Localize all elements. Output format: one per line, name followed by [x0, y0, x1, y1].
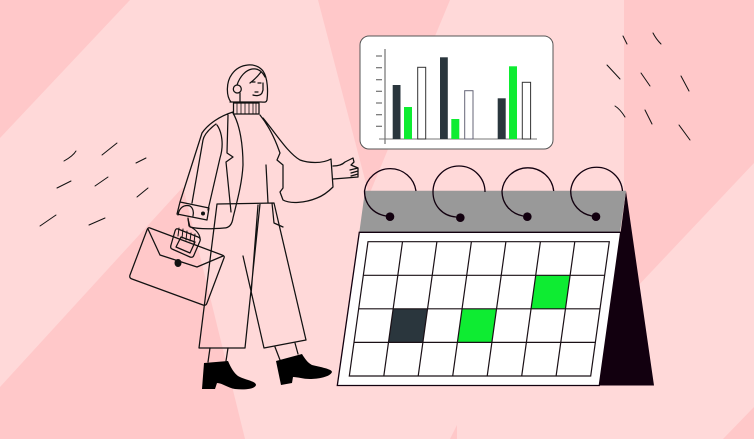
bag handle	[171, 229, 200, 257]
motion dashes right	[607, 33, 690, 140]
legs	[208, 343, 298, 362]
bag flap	[148, 229, 223, 267]
outlined bars	[418, 67, 531, 139]
binder ring 3	[502, 168, 554, 221]
calendar header	[359, 191, 626, 232]
trousers	[199, 203, 306, 348]
calendar grid	[349, 242, 609, 376]
facial features	[252, 82, 261, 92]
dark bars	[393, 57, 506, 139]
bar chart panel	[360, 36, 553, 149]
right boot	[276, 354, 332, 385]
binder ring 4	[571, 167, 622, 221]
binder ring 2	[433, 166, 485, 222]
bag outline	[130, 228, 224, 305]
briefcase	[130, 228, 224, 305]
sweater and sleeve	[260, 115, 333, 227]
collar	[234, 103, 259, 114]
desk calendar	[337, 166, 654, 386]
fingers	[178, 228, 195, 243]
motion dashes left	[40, 143, 148, 226]
right hand	[333, 158, 358, 179]
green bars	[404, 66, 517, 139]
calendar stand	[599, 191, 654, 386]
chart card	[360, 36, 553, 149]
chart axes and ticks	[376, 49, 537, 144]
binder ring 1	[364, 169, 416, 221]
left boot	[202, 361, 256, 389]
left hand	[178, 205, 200, 238]
ear	[233, 85, 241, 93]
hair and head	[227, 65, 268, 102]
bag clasp	[174, 259, 182, 267]
coat	[177, 112, 243, 229]
dark highlighted cell	[388, 309, 428, 342]
woman walking with briefcase	[130, 65, 358, 362]
coat button	[201, 212, 205, 216]
calendar page	[337, 232, 621, 386]
green highlighted cells	[457, 275, 570, 342]
